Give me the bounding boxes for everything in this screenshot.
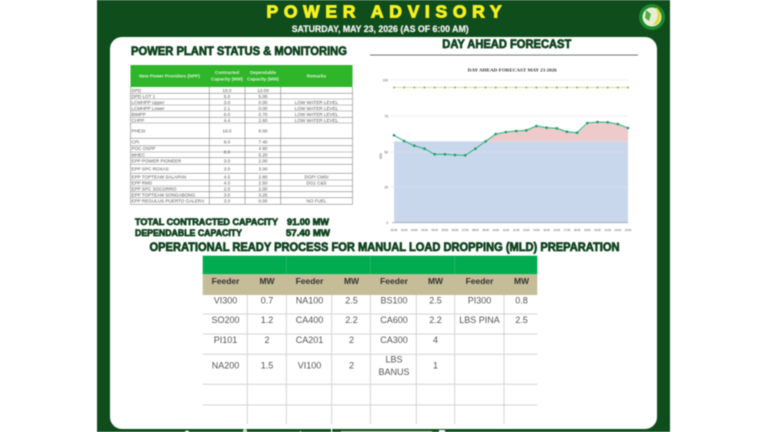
- table: power providers: 7.40: [259, 140, 268, 144]
- table: power providers: PHESI: [132, 128, 145, 134]
- x axis labels: 04:00: [431, 228, 438, 232]
- table: feeders: 0.7: [261, 296, 273, 306]
- table header: New Power Providers (NPP): [139, 74, 200, 78]
- table: power providers: EPP TOPTEAM SALAPAN: [132, 174, 186, 180]
- table: feeders: Feeder: [212, 276, 240, 286]
- table: feeders: MW: [259, 276, 276, 286]
- table: feeders: NA100: [296, 296, 323, 306]
- table: power providers: 3.00: [259, 166, 268, 172]
- x axis labels: 22:00: [615, 228, 622, 232]
- table: feeders: LBS: [385, 354, 403, 364]
- x axis labels: 03:00: [421, 228, 428, 232]
- y axis labels: 75: [384, 114, 388, 118]
- table header: Capacity (MW): [211, 76, 243, 82]
- table: feeders: CA600: [380, 315, 408, 325]
- table: power providers: 2.1: [224, 106, 231, 111]
- table: power providers: DG1 C&S: [306, 180, 327, 186]
- capacity area: [394, 141, 628, 223]
- table: feeders: 1.5: [261, 360, 273, 370]
- table header: [130, 65, 352, 87]
- table: power providers: EPP TOPTEAM SONGABONG: [132, 192, 196, 198]
- table: feeders: 0.8: [515, 296, 528, 306]
- table: power providers: [130, 65, 352, 204]
- x axis labels: 19:00: [584, 228, 591, 232]
- table: power providers: 8.0: [224, 150, 231, 154]
- table: feeders: MW: [344, 276, 360, 286]
- table: power providers: 6.0: [224, 112, 231, 117]
- table: feeders: 1: [433, 360, 438, 370]
- table: power providers: 5.20: [259, 152, 268, 158]
- y axis labels: 0: [386, 221, 388, 225]
- table: power providers: DPD: [132, 88, 142, 93]
- x axis labels: 10:00: [492, 228, 499, 232]
- table: feeders: LBS PINA: [459, 315, 500, 325]
- table: power providers: 3.0: [224, 158, 231, 164]
- table: power providers: 2.0: [224, 186, 231, 192]
- table: power providers: DPD LOT 1: [132, 94, 156, 99]
- divider line under forecast heading: [370, 54, 638, 56]
- table header: Capacity (MW): [247, 76, 279, 82]
- dependable capacity: 57.40 MW: [286, 228, 331, 238]
- table: feeders: CA300: [380, 335, 408, 345]
- table: feeders: Feeder: [296, 276, 324, 286]
- table: power providers: 0.00: [259, 106, 268, 111]
- table: power providers: EPP POWER PIONEER: [132, 158, 182, 164]
- header separators: [286, 256, 455, 274]
- heading: manual load dropping: OPERATIONAL READY PROCESS FOR MANUAL LOAD DROPPING (MLD) PREPARATION: [150, 242, 620, 254]
- x axis labels: 14:00: [533, 228, 540, 232]
- table: feeders: VI300: [214, 296, 237, 306]
- table: feeders: 2.5: [515, 315, 528, 325]
- table header: Remarks: [307, 74, 327, 78]
- table: power providers: 3.25: [259, 192, 268, 198]
- table: feeders: 1.2: [261, 315, 273, 325]
- table: feeders: CA201: [296, 335, 323, 345]
- table: power providers: 4.0: [224, 180, 231, 186]
- total contracted capacity: TOTAL CONTRACTED CAPACITY: [135, 217, 278, 227]
- x axis labels: 07:00: [462, 228, 469, 232]
- x axis labels: 13:00: [523, 228, 530, 232]
- table: power providers: 3.0: [224, 100, 231, 105]
- table: power providers: 4.5: [224, 174, 231, 180]
- table: feeders: SO200: [211, 315, 240, 325]
- table: feeders: 2: [264, 335, 270, 345]
- y axis labels: 50: [384, 150, 388, 154]
- table: feeders: MW: [514, 276, 530, 286]
- x axis labels: 16:00: [554, 228, 561, 232]
- y axis labels: 100: [383, 78, 388, 82]
- table: power providers: 5.0: [224, 94, 231, 99]
- table: power providers: 3.0: [224, 198, 231, 204]
- table: feeders: BS100: [380, 296, 408, 306]
- table: feeders: 2.2: [345, 315, 358, 325]
- table: power providers: 5.00: [259, 94, 268, 99]
- x axis labels: 08:00: [472, 228, 479, 232]
- chart: day ahead forecast: [379, 68, 632, 232]
- table: power providers: LOW WATER LEVEL: [295, 112, 339, 117]
- x axis labels: 01:00: [401, 228, 408, 232]
- table: feeders: PI300: [468, 296, 491, 306]
- table: feeders: Feeder: [380, 276, 409, 286]
- table: power providers: BIMPP: [132, 112, 146, 117]
- total contracted capacity: 91.00 MW: [287, 217, 330, 227]
- table: power providers: EPP SPC SOCORRO: [132, 186, 177, 192]
- x axis labels: 11:00: [503, 228, 510, 232]
- date subtitle: SATURDAY, MAY 23, 2026 (AS OF 6:00 AM): [292, 24, 469, 35]
- x axis labels: 17:00: [564, 228, 571, 232]
- table: feeders: Feeder: [466, 276, 494, 286]
- table: feeders: 2: [349, 335, 354, 345]
- table: power providers: EPP REGULUS PUERTO GALERA: [132, 198, 205, 204]
- table: feeders: NA200: [212, 360, 239, 370]
- y axis labels: MW: [379, 153, 383, 159]
- dependable capacity: [135, 228, 331, 238]
- table: power providers: 2.00: [259, 158, 268, 164]
- table: power providers: MHEC: [132, 152, 146, 158]
- table: power providers: EPP SPC ROXAS: [132, 166, 169, 172]
- table: feeders: CA400: [296, 315, 323, 325]
- y axis labels: 25: [384, 186, 388, 190]
- table header: Contracted: [215, 70, 239, 75]
- table: power providers: 13.00: [257, 88, 269, 93]
- table: power providers: LOW WATER LEVEL: [295, 100, 339, 105]
- table: power providers: 15.0: [223, 88, 232, 93]
- table: power providers: POC OSPP: [132, 146, 156, 151]
- table: power providers: LOW WATER LEVEL: [295, 106, 339, 111]
- x axis labels: 00:00: [391, 228, 398, 232]
- heading: power plant status: POWER PLANT STATUS & MONITORING: [131, 46, 347, 58]
- forecast demand line: [393, 121, 629, 157]
- table: power providers: 2.00: [259, 186, 268, 192]
- table header: Dependable: [250, 70, 276, 75]
- y axis labels: [379, 78, 388, 225]
- table: power providers: 2.80: [259, 174, 268, 180]
- table: feeders: [203, 256, 537, 424]
- table: power providers: 3.0: [224, 192, 231, 198]
- heading: day ahead forecast: DAY AHEAD FORECAST: [442, 39, 571, 51]
- table: power providers: 4.90: [259, 146, 268, 151]
- table: power providers: 3.0: [224, 166, 231, 172]
- chart title: DAY AHEAD FORECAST MAY 23 2026: [468, 68, 557, 72]
- table: power providers: 4.4: [224, 118, 231, 123]
- footer contact strip: [184, 429, 445, 432]
- icon: logo: [639, 4, 665, 30]
- table: power providers: LCMHPP Lower: [132, 106, 165, 111]
- table: power providers: NO FUEL: [307, 198, 327, 204]
- x axis labels: [391, 228, 632, 232]
- dependable capacity: DEPENDABLE CAPACITY: [135, 228, 242, 238]
- table: power providers: DGP/ CMSI: [304, 174, 328, 180]
- title: POWER ADVISORY: [266, 2, 502, 22]
- table: power providers: 2.60: [259, 118, 268, 123]
- table: power providers: CPI: [132, 140, 139, 144]
- table: feeders: VI100: [298, 360, 321, 370]
- table: power providers: LOW WATER LEVEL: [295, 118, 339, 123]
- x axis labels: 15:00: [543, 228, 550, 232]
- table: feeders: 2: [349, 360, 354, 370]
- table: power providers: LCMHPP Upper: [132, 100, 165, 105]
- green background panel: [97, 0, 670, 432]
- white content card: [110, 37, 657, 429]
- x axis labels: 18:00: [574, 228, 581, 232]
- x axis labels: 02:00: [411, 228, 418, 232]
- table: feeders: 2.5: [345, 296, 358, 306]
- x axis labels: 23:00: [625, 228, 632, 232]
- deficit area: [486, 122, 628, 141]
- table: feeders: 2.2: [429, 315, 442, 325]
- x axis labels: 06:00: [452, 228, 459, 232]
- table: power providers: EPP RMS: [132, 180, 152, 186]
- table: power providers: 2.50: [259, 180, 268, 186]
- table: power providers: 8.00: [259, 128, 268, 134]
- table: feeders: BANUS: [378, 367, 410, 377]
- table: power providers: 0.00: [259, 198, 268, 204]
- green header band: [203, 256, 537, 274]
- table: feeders: 2.5: [429, 296, 442, 306]
- table: power providers: 9.0: [224, 140, 231, 144]
- table: power providers: 0.00: [259, 100, 268, 105]
- x axis labels: 20:00: [594, 228, 601, 232]
- table: feeders: MW: [428, 276, 444, 286]
- contracted capacity dotted line: [393, 86, 629, 88]
- x axis labels: 05:00: [442, 228, 449, 232]
- x axis labels: 12:00: [513, 228, 520, 232]
- table: feeders: PI101: [214, 335, 237, 345]
- table: feeders: 4: [433, 335, 438, 345]
- table: power providers: 16.0: [223, 128, 232, 134]
- x axis line: [392, 222, 628, 224]
- tan column header band: [203, 274, 537, 295]
- table: power providers: CHPP: [132, 118, 144, 123]
- x axis labels: 21:00: [604, 228, 611, 232]
- x axis labels: 09:00: [482, 228, 489, 232]
- table: power providers: 0.70: [259, 112, 268, 117]
